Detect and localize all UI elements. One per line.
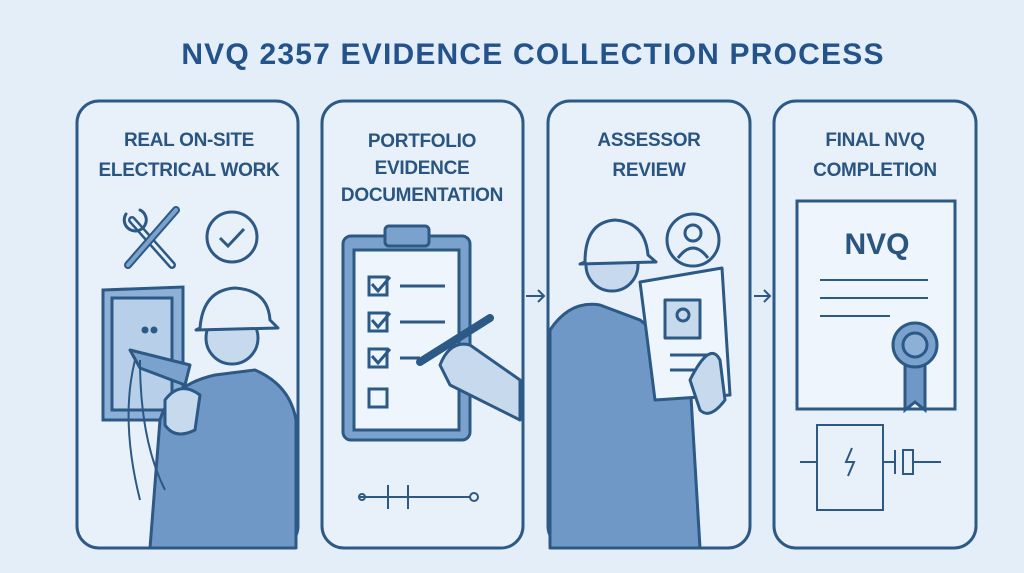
certificate xyxy=(797,201,955,410)
circuit box xyxy=(800,425,941,510)
clipboard xyxy=(343,226,470,440)
panel: assessor review xyxy=(548,101,750,548)
circuit symbol xyxy=(359,485,478,509)
heading 1: ELECTRICAL WORK xyxy=(99,160,280,181)
seal xyxy=(905,360,925,410)
arrow 1 xyxy=(526,290,544,302)
heading 2: EVIDENCE xyxy=(375,158,469,179)
certificate: NVQ xyxy=(844,228,910,261)
heading 3: REVIEW xyxy=(612,160,686,181)
panel: final nvq completion xyxy=(774,101,976,548)
icon: check circle xyxy=(207,212,257,262)
heading 3: ASSESSOR xyxy=(597,130,701,151)
heading 4: COMPLETION xyxy=(813,160,937,181)
icon: person avatar xyxy=(667,214,719,266)
title: NVQ 2357 EVIDENCE COLLECTION PROCESS xyxy=(181,38,885,71)
electrical box xyxy=(103,287,183,420)
heading 2: DOCUMENTATION xyxy=(341,185,503,206)
heading 2: PORTFOLIO xyxy=(368,131,476,152)
heading 1: REAL ON-SITE xyxy=(124,130,254,151)
worker 1 xyxy=(129,288,296,548)
panel: real on-site electrical work xyxy=(77,101,298,548)
arrow 2 xyxy=(754,290,770,302)
worker 3 xyxy=(550,220,730,548)
icon: tools xyxy=(124,210,176,265)
hand with pen xyxy=(420,318,520,420)
panel: portfolio evidence documentation xyxy=(322,101,523,548)
heading 4: FINAL NVQ xyxy=(825,130,925,151)
